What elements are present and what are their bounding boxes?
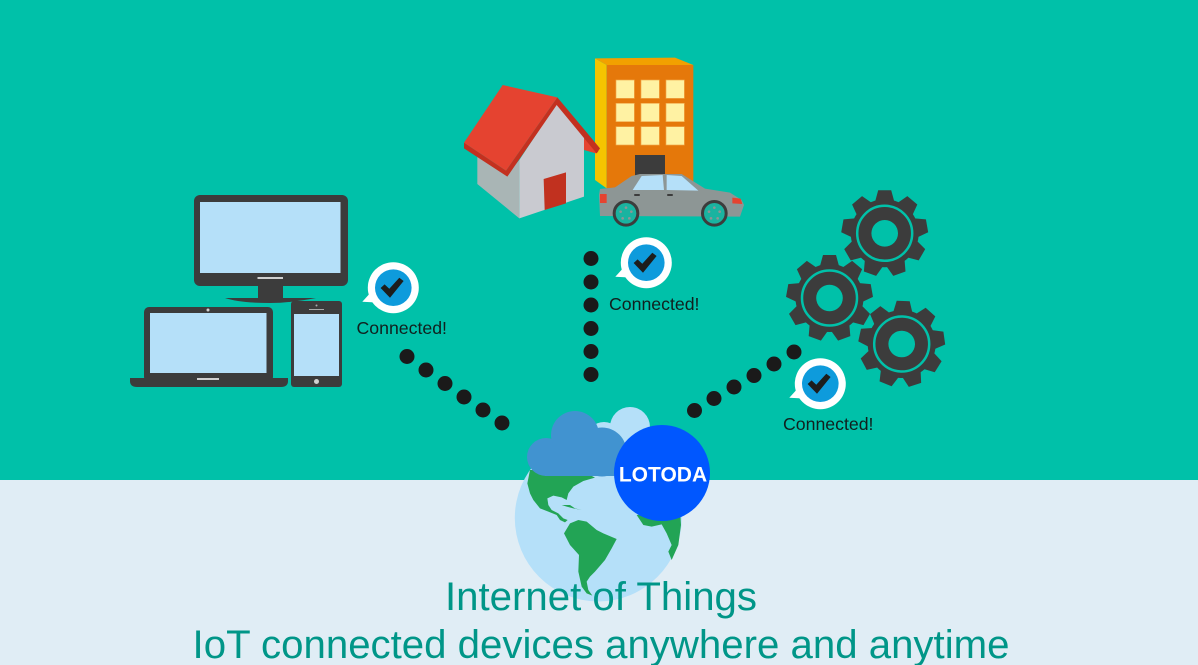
icon: smartphone [291,301,342,387]
background: teal upper band [0,0,1198,480]
icon: building, house and car [464,58,744,225]
title: Internet of Things [445,574,757,619]
icon: car [599,174,744,225]
dotted connector: devices to cloud [400,349,510,430]
background: pale lower band [0,480,1198,665]
icon: top gear [841,190,929,277]
badge: LOTODA logo [614,425,710,521]
label: connected, devices: Connected! [356,318,447,338]
label: connected, gears: Connected! [783,414,873,434]
icon: desktop monitor [194,195,348,303]
dotted connector: gears to cloud [687,344,802,418]
icon: house [464,85,600,218]
icon: blue cloud [527,411,627,476]
icon: right gear [856,299,947,389]
icon: office building [595,58,693,188]
icon: connected badge, gears [789,358,846,409]
icon: computing devices [130,195,348,387]
dotted connector: buildings to cloud [584,251,598,382]
icon: light cloud [586,407,650,458]
icon: laptop [130,307,288,387]
icon: gears [786,190,947,389]
icon: left gear [786,255,873,342]
badge: LOTODA logo: LOTODA [619,464,707,486]
icon: globe [515,434,682,602]
icon: connected badge, devices [362,262,419,313]
label: connected, buildings: Connected! [609,294,699,314]
icon: connected badge, buildings [615,237,672,288]
icon: globe with clouds [515,407,710,602]
